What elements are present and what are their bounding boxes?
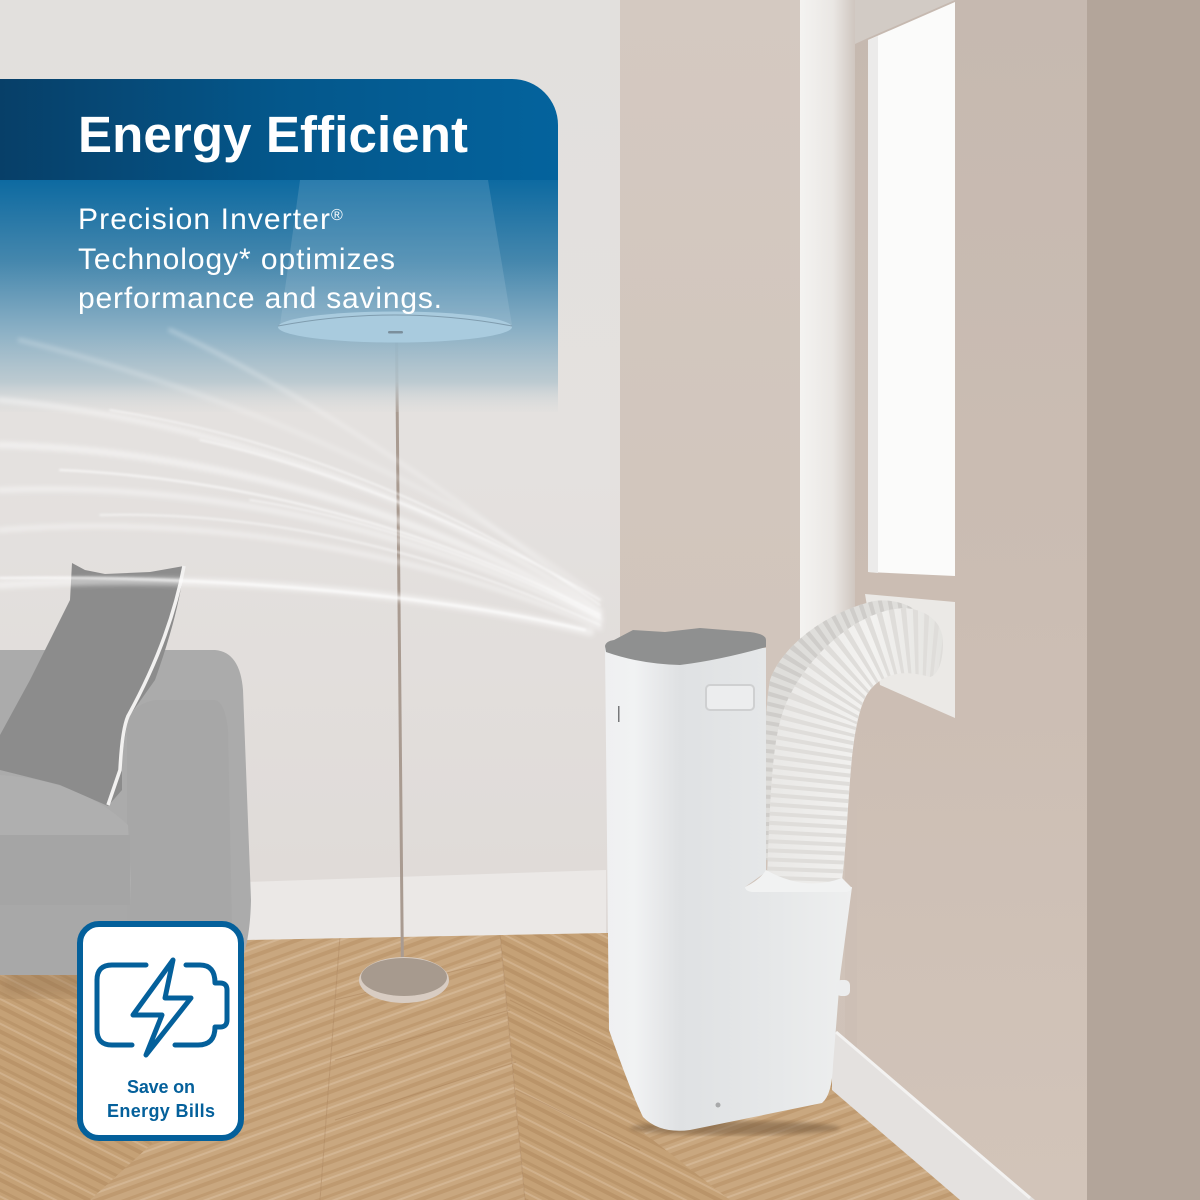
window	[865, 2, 955, 718]
description: performance and savings.	[78, 282, 442, 315]
portable air conditioner	[605, 628, 852, 1135]
badge label: Save on	[127, 1077, 195, 1097]
floor lamp	[359, 335, 449, 1003]
description: ®	[331, 207, 343, 224]
description: Precision Inverter	[78, 203, 330, 236]
baseboards	[245, 870, 1035, 1200]
sofa	[0, 650, 251, 975]
badge label: Energy Bills	[107, 1101, 215, 1121]
badge: save on energy bills	[80, 924, 241, 1138]
header bar	[0, 79, 558, 180]
handle	[706, 685, 754, 710]
lamp shade	[278, 180, 512, 342]
cushion	[0, 563, 184, 806]
sensor	[716, 1102, 720, 1108]
badge label	[107, 1077, 215, 1121]
icon: battery with lightning bolt	[97, 960, 227, 1055]
title: Energy Efficient	[78, 106, 468, 163]
back hose	[766, 600, 913, 860]
description: Technology* optimizes	[78, 243, 395, 276]
side drain plug	[836, 980, 850, 996]
top grey cap	[605, 628, 766, 665]
logo mark	[618, 706, 620, 722]
description	[78, 203, 442, 315]
front hose	[767, 608, 945, 890]
headline fade panel	[0, 180, 558, 412]
wood floor	[0, 933, 960, 1200]
air flow streaks	[0, 330, 600, 632]
